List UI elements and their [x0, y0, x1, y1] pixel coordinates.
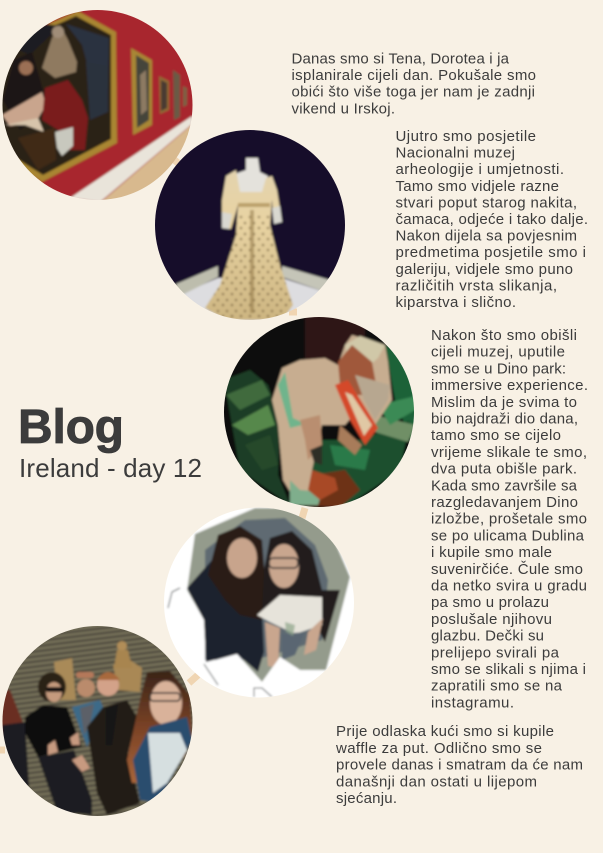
subheading: Ireland - day 12: Ireland - day 12 [19, 453, 202, 483]
text block: morning at the museum: Nacionalni muzej [396, 145, 515, 162]
photo: two girls [160, 503, 360, 703]
text block: Dino park and Dublin: i kupile smo male [431, 544, 552, 561]
text block: morning at the museum: predmetima posjetile smo i [396, 244, 586, 261]
text block: intro: Danas smo si Tena, Dorotea i ja [292, 50, 510, 68]
text block: closing: waffle za put. Odlično smo se [335, 740, 542, 757]
text block: intro: isplanirale cijeli dan. Pokušale smo [292, 67, 536, 84]
text block: morning at the museum [396, 128, 588, 311]
text block: morning at the museum: Ujutro smo posjetile [396, 128, 536, 145]
photo: group with band on the street [0, 624, 195, 819]
text block: closing: Prije odlaska kući smo si kupile [336, 723, 554, 740]
photo: historic dress in museum [150, 125, 350, 325]
text block: intro: obići što više toga jer nam je zadnji [292, 84, 535, 101]
photo: dinosaur among plants [220, 314, 420, 512]
text block: Dino park and Dublin: smo se slikali s njima i [431, 661, 586, 678]
text block: Dino park and Dublin: izložbe, prošetale smo [431, 511, 587, 528]
text block: morning at the museum: kiparstva i slično. [396, 294, 516, 311]
text block: Dino park and Dublin: glazbu. Dečki su [431, 628, 544, 645]
text block: morning at the museum: Tamo smo vidjele razne [396, 178, 559, 195]
photo: red gallery wall with paintings [0, 8, 195, 203]
text block: Dino park and Dublin: tamo smo se cijelo [431, 427, 561, 444]
text block: morning at the museum: Nakon dijela sa povjesnim [396, 228, 577, 245]
text block: Dino park and Dublin [431, 327, 588, 711]
text block: Dino park and Dublin: dva puta obišle park. [431, 461, 577, 478]
text block: morning at the museum: čamaca, odjeće i tako dalje. [396, 211, 588, 228]
text block: Dino park and Dublin: pa smo u prolazu [431, 594, 549, 611]
text block: Dino park and Dublin: Kada smo završile sa [431, 477, 578, 494]
text block: Dino park and Dublin: poslušale njihovu [431, 611, 552, 628]
heading: Blog: Blog [18, 401, 124, 454]
text block: Dino park and Dublin: smo se u Dino park: [431, 360, 566, 377]
text block: morning at the museum: galeriju, vidjele smo puno [396, 261, 573, 278]
text block: Dino park and Dublin: razgledavanjem Dino [431, 494, 578, 511]
text block: closing: provele danas i smatram da će nam [336, 757, 583, 774]
text block: Dino park and Dublin: prelijepo svirali pa [431, 644, 560, 661]
text block: Dino park and Dublin: cijeli muzej, uputile [431, 344, 565, 361]
text block: Dino park and Dublin: se po ulicama Dublina [431, 527, 585, 544]
text block: Dino park and Dublin: zapratili smo se na [431, 678, 563, 695]
text block: Dino park and Dublin: immersive experience. [431, 377, 588, 394]
text block: morning at the museum: stvari poput starog nakita, [396, 194, 577, 211]
text block: Dino park and Dublin: vrijeme slikale te smo, [431, 444, 587, 461]
text block: closing: današnji dan ostati u lijepom [336, 773, 537, 790]
text block: closing: sjećanju. [336, 790, 397, 807]
text block: Dino park and Dublin: instagramu. [431, 694, 514, 711]
text block: morning at the museum: različitih vrsta slikanja, [396, 277, 557, 294]
text block: Dino park and Dublin: da netko svira u gradu [431, 578, 587, 594]
text block: morning at the museum: arheologije i umjetnosti. [396, 161, 564, 178]
text block: intro: vikend u Irskoj. [292, 100, 395, 117]
text block: Dino park and Dublin: bio najdraži dio dana, [431, 410, 578, 428]
text block: Dino park and Dublin: Nakon što smo obišli [431, 327, 577, 344]
text block: Dino park and Dublin: Mislim da je svima to [431, 394, 577, 411]
text block: Dino park and Dublin: suvenirčiće. Čule smo [431, 561, 583, 578]
text block: intro [292, 50, 536, 117]
connector fragments between photos [0, 158, 305, 750]
text block: closing [335, 723, 583, 807]
